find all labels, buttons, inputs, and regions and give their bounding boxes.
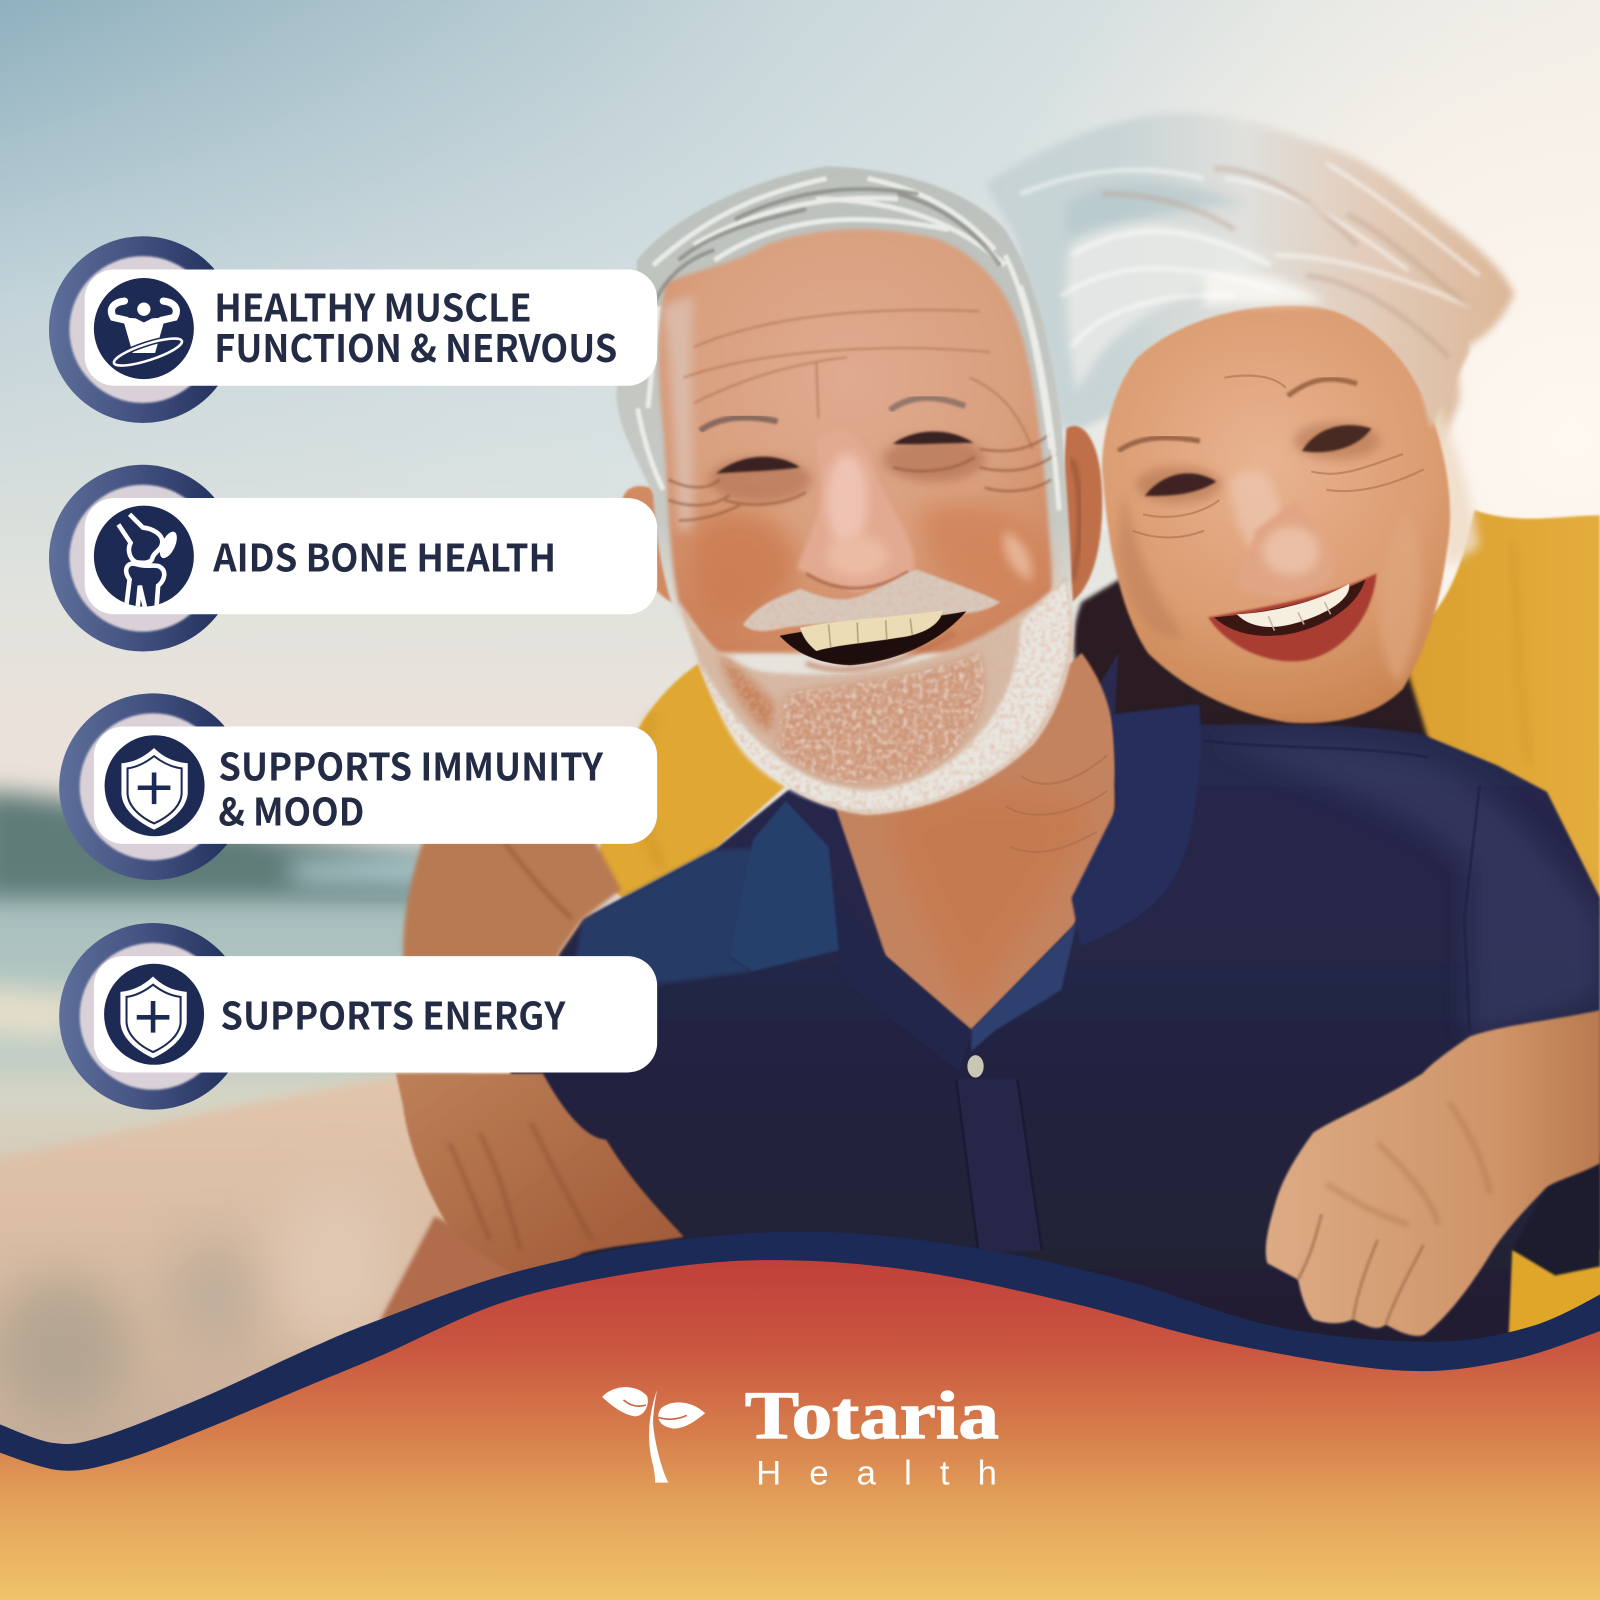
footer wave: navy band <box>0 1232 1600 1600</box>
man's hair strands <box>638 179 1059 510</box>
label: supports immunity and mood: SUPPORTS IMMUNITY <box>218 737 604 792</box>
photo: polo collar <box>730 704 1201 1071</box>
ring medallion 3 <box>59 693 247 880</box>
label: healthy muscle function and nervous: HEALTHY MUSCLE <box>214 277 532 332</box>
icon: shield plus <box>104 964 204 1065</box>
icon: bone joint <box>94 506 194 612</box>
label: supports immunity and mood <box>218 737 604 837</box>
pill 1 <box>85 269 657 386</box>
label: aids bone health: AIDS BONE HEALTH <box>212 527 556 582</box>
benefit item 3: immunity and mood <box>59 693 657 880</box>
pill 3 <box>94 727 657 844</box>
benefit item 4: energy <box>59 923 657 1110</box>
logo icon: sprout <box>602 1387 705 1483</box>
logo: Totaria Health <box>602 1378 999 1493</box>
pill 2 <box>85 498 657 614</box>
man's nose <box>797 431 914 592</box>
logo wordmark <box>745 1378 999 1493</box>
label: healthy muscle function and nervous: FUNCTION & NERVOUS <box>214 318 617 373</box>
man's forehead wrinkles <box>684 310 1033 449</box>
woman's eyes and brows <box>1118 376 1423 538</box>
photo: woman's hair and face <box>985 113 1514 740</box>
benefit item 2: bone health <box>49 465 657 652</box>
benefit item 1: healthy muscle <box>49 236 657 423</box>
label: supports energy: SUPPORTS ENERGY <box>220 986 566 1041</box>
man's beard and moustache <box>679 569 1073 814</box>
woman's hair fringe and strands <box>1020 163 1480 429</box>
woman's smile <box>1208 573 1377 661</box>
footer wave: gradient panel <box>0 1260 1600 1600</box>
photo: man's head and ears <box>616 166 1102 814</box>
logo wordmark: Totaria <box>745 1378 999 1453</box>
photo: woman's left forearm and hand <box>380 832 684 1327</box>
icon: shield plus <box>105 735 205 836</box>
ring medallion 4 <box>59 923 247 1110</box>
pill 4 <box>94 956 657 1072</box>
man's eyes and brows <box>668 398 1056 520</box>
photo: man's neck <box>832 653 1115 1030</box>
polo placket and button <box>956 1055 1042 1253</box>
photo: man's polo shirt <box>510 653 1600 1357</box>
ring medallion 2 <box>49 465 237 652</box>
photo: woman's yellow shirt <box>592 510 1600 918</box>
ring medallion 1 <box>49 236 237 423</box>
label: healthy muscle function and nervous <box>214 277 617 373</box>
label: supports immunity and mood: & MOOD <box>218 782 364 837</box>
photo: woman's right arm and hand <box>1266 1010 1600 1347</box>
logo wordmark: Health <box>756 1455 997 1493</box>
man's smile <box>780 610 966 669</box>
icon: muscle <box>94 278 194 379</box>
